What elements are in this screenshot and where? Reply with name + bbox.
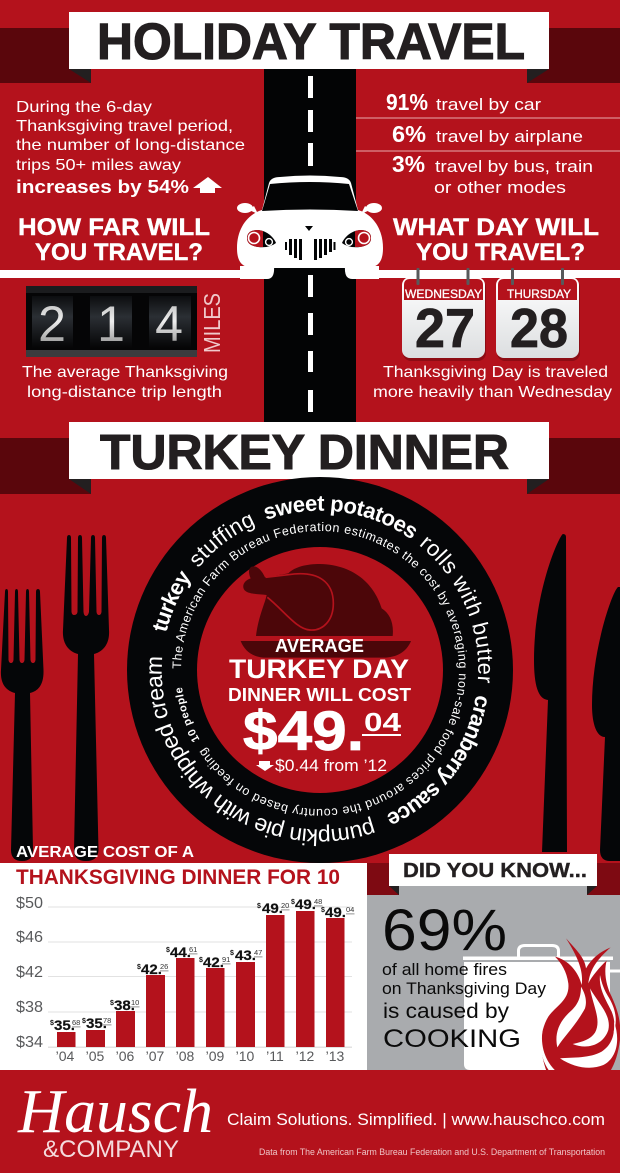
calendar: Thursday 28: THURSDAY xyxy=(507,287,571,301)
dinner cost callout: TURKEY DAY xyxy=(229,654,409,684)
text block: long-distance trips: Thanksgiving travel period, xyxy=(16,118,233,135)
plate with food words xyxy=(127,477,513,863)
chart heading: AVERAGE COST OF A xyxy=(16,844,194,861)
panel: average cost bar chart: 78 xyxy=(103,1016,111,1025)
plate with food words: 10 people xyxy=(175,688,200,742)
heading: How far will you travel: YOU TRAVEL? xyxy=(35,239,203,266)
inner ring methodology text: The American Farm Bureau Federation estimates the cost by averaging non-sale food prices around the country based on feeding xyxy=(172,522,467,816)
text block: long-distance trips xyxy=(16,99,245,197)
calendar: Thursday 28 xyxy=(496,268,580,361)
calendar: Wednesday 27: 27 xyxy=(415,297,475,359)
caption: average trip length: The average Thanksgiving xyxy=(22,364,228,381)
plate with food words: cranberry sauce xyxy=(388,696,487,824)
transport mode statistics: 3% xyxy=(392,151,425,177)
panel: average cost bar chart: $ xyxy=(230,950,234,957)
panel: average cost bar chart: $ xyxy=(166,947,170,954)
caption: average trip length xyxy=(22,364,228,401)
x axis year labels: ’13 xyxy=(326,1048,345,1064)
heading: How far will you travel: HOW FAR WILL xyxy=(18,214,210,241)
bar value labels: 49. xyxy=(325,905,346,920)
text block: long-distance trips: trips 50+ miles away xyxy=(16,157,181,174)
panel: average cost bar chart: $ xyxy=(199,957,203,964)
bars xyxy=(57,911,344,1047)
bar value labels: 49. xyxy=(295,897,316,912)
icon: cooking pot xyxy=(463,946,620,1070)
caption: Thanksgiving Day traveled more: Thanksgiving Day is traveled xyxy=(383,364,608,381)
odometer: 214 miles: 2 xyxy=(38,296,66,352)
y axis labels: $42 xyxy=(16,964,43,981)
dinner cost callout: $49. xyxy=(243,699,364,762)
plate with food words: sweet potatoes xyxy=(264,496,416,538)
x axis year labels: ’04 xyxy=(56,1048,75,1064)
text block: home fires: COOKING xyxy=(383,1025,521,1053)
icon: roast turkey xyxy=(241,564,411,658)
transport mode statistics xyxy=(356,89,620,197)
label: miles: MILES xyxy=(199,293,225,353)
road xyxy=(264,60,356,425)
caption: average trip length: long-distance trip length xyxy=(27,384,222,401)
cents underlines xyxy=(72,906,354,1027)
x axis year labels: ’12 xyxy=(296,1048,315,1064)
x axis year labels: ’11 xyxy=(266,1048,284,1064)
heading: What day will you travel: WHAT DAY WILL xyxy=(393,214,599,241)
text block: long-distance trips: the number of long-distance xyxy=(16,137,245,154)
text block: home fires: is caused by xyxy=(383,1000,510,1023)
panel: average cost bar chart: $ xyxy=(291,899,295,906)
text block: long-distance trips: During the 6-day xyxy=(16,99,152,116)
section banner: Turkey Dinner xyxy=(0,422,620,494)
dinner cost callout: 04 xyxy=(364,709,402,737)
panel: average cost bar chart xyxy=(0,844,367,1070)
bar value labels: 35. xyxy=(54,1018,75,1033)
bar value labels: 35. xyxy=(86,1016,107,1031)
dinner cost callout xyxy=(228,635,411,775)
text block: home fires: on Thanksgiving Day xyxy=(382,980,547,998)
bar value labels: 42. xyxy=(141,962,162,977)
y axis labels: $34 xyxy=(16,1034,43,1051)
data source: Data from The American Farm Bureau Federation and U.S. Department of Transportation xyxy=(259,1147,605,1157)
panel: did you know xyxy=(367,854,620,1072)
statistic: 69 percent: 69% xyxy=(382,898,507,963)
transport mode statistics: or other modes xyxy=(434,178,566,197)
panel: average cost bar chart: $ xyxy=(257,903,261,910)
bar value labels: 49. xyxy=(262,901,283,916)
transport mode statistics: travel by airplane xyxy=(436,127,583,146)
x axis year labels: ’09 xyxy=(206,1048,225,1064)
heading: Holiday Travel: HOLIDAY TRAVEL xyxy=(97,13,525,70)
odometer: 214 miles: 4 xyxy=(155,296,183,352)
plate with food words: pumpkin pie with whipped cream xyxy=(149,658,375,846)
text block: home fires xyxy=(382,961,547,1053)
x axis year labels: ’06 xyxy=(116,1048,135,1064)
panel: average cost bar chart: $ xyxy=(82,1018,86,1025)
panel: average cost bar chart: 68 xyxy=(72,1018,80,1027)
transport mode statistics: travel by bus, train xyxy=(435,157,593,176)
transport mode statistics: 6% xyxy=(392,121,426,147)
heading: did you know: DID YOU KNOW... xyxy=(403,859,587,882)
logo: Hausch and Company: &COMPANY xyxy=(43,1136,179,1163)
heading: How far will you travel xyxy=(18,214,210,266)
panel: average cost bar chart: 20 xyxy=(281,901,289,910)
icon: flames xyxy=(541,938,620,1072)
icons: forks xyxy=(1,535,109,861)
panel: average cost bar chart: 48 xyxy=(314,897,322,906)
plate with food words: rolls with butter xyxy=(420,536,492,684)
panel: average cost bar chart: 47 xyxy=(254,948,262,957)
bar value labels: 38. xyxy=(114,998,135,1013)
y axis labels: $50 xyxy=(16,895,43,912)
dinner cost callout: $0.44 from ’12 xyxy=(275,757,387,775)
heading: Turkey Dinner: TURKEY DINNER xyxy=(100,425,509,480)
panel: average cost bar chart: 61 xyxy=(189,945,197,954)
panel: average cost bar chart: 26 xyxy=(160,962,168,971)
calendar: Thursday 28: 28 xyxy=(510,297,568,359)
odometer: 214 miles xyxy=(26,286,225,357)
panel: average cost bar chart: THANKSGIVING DINNER FOR 10 xyxy=(16,866,340,889)
plate with food words: stuffing xyxy=(192,514,255,566)
bar value labels: 44. xyxy=(170,945,191,960)
icons: knives xyxy=(534,534,620,861)
bar value labels xyxy=(54,897,346,1033)
footer xyxy=(0,1070,620,1173)
x axis year labels xyxy=(56,1048,345,1064)
panel: average cost bar chart: $ xyxy=(137,964,141,971)
outer ring words: turkey xyxy=(153,570,192,631)
odometer: 214 miles: 1 xyxy=(97,296,125,352)
y axis labels: $46 xyxy=(16,929,43,946)
x axis year labels: ’10 xyxy=(236,1048,255,1064)
text block: long-distance trips: increases by 54% xyxy=(16,177,189,197)
horizon line xyxy=(0,270,620,278)
logo: Hausch and Company: Hausch xyxy=(17,1078,213,1146)
dinner cost callout: DINNER WILL COST xyxy=(228,685,411,705)
panel: average cost bar chart: 10 xyxy=(131,998,139,1007)
x axis year labels: ’07 xyxy=(146,1048,165,1064)
y axis labels: $38 xyxy=(16,999,43,1016)
calendar: Wednesday 27 xyxy=(402,268,486,361)
x axis year labels: ’08 xyxy=(176,1048,195,1064)
transport mode statistics: 91% xyxy=(386,89,428,115)
transport mode statistics: travel by car xyxy=(436,95,541,114)
text block: home fires: of all home fires xyxy=(382,961,507,979)
heading: What day will you travel xyxy=(393,214,599,266)
caption: Thanksgiving Day traveled more: more heavily than Wednesday xyxy=(373,384,612,401)
panel: average cost bar chart: 91 xyxy=(222,955,230,964)
icon: car xyxy=(237,176,383,279)
caption: Thanksgiving Day traveled more xyxy=(373,364,612,401)
calendar: Wednesday 27: WEDNESDAY xyxy=(405,287,482,301)
panel: average cost bar chart: $ xyxy=(50,1020,54,1027)
icon: down arrow xyxy=(256,761,274,771)
heading: What day will you travel: YOU TRAVEL? xyxy=(416,239,585,266)
bar value labels: 43. xyxy=(235,948,256,963)
title banner: Holiday Travel xyxy=(0,12,620,83)
panel: average cost bar chart: 04 xyxy=(346,905,354,914)
tagline: Claim Solutions. Simplified. | www.hauschco.com xyxy=(227,1110,605,1129)
y axis labels xyxy=(16,895,43,1051)
bar value labels: 42. xyxy=(203,955,224,970)
x axis year labels: ’05 xyxy=(86,1048,105,1064)
dinner cost callout: AVERAGE xyxy=(275,635,364,656)
panel: average cost bar chart: $ xyxy=(321,907,325,914)
panel: average cost bar chart: $ xyxy=(110,1000,114,1007)
